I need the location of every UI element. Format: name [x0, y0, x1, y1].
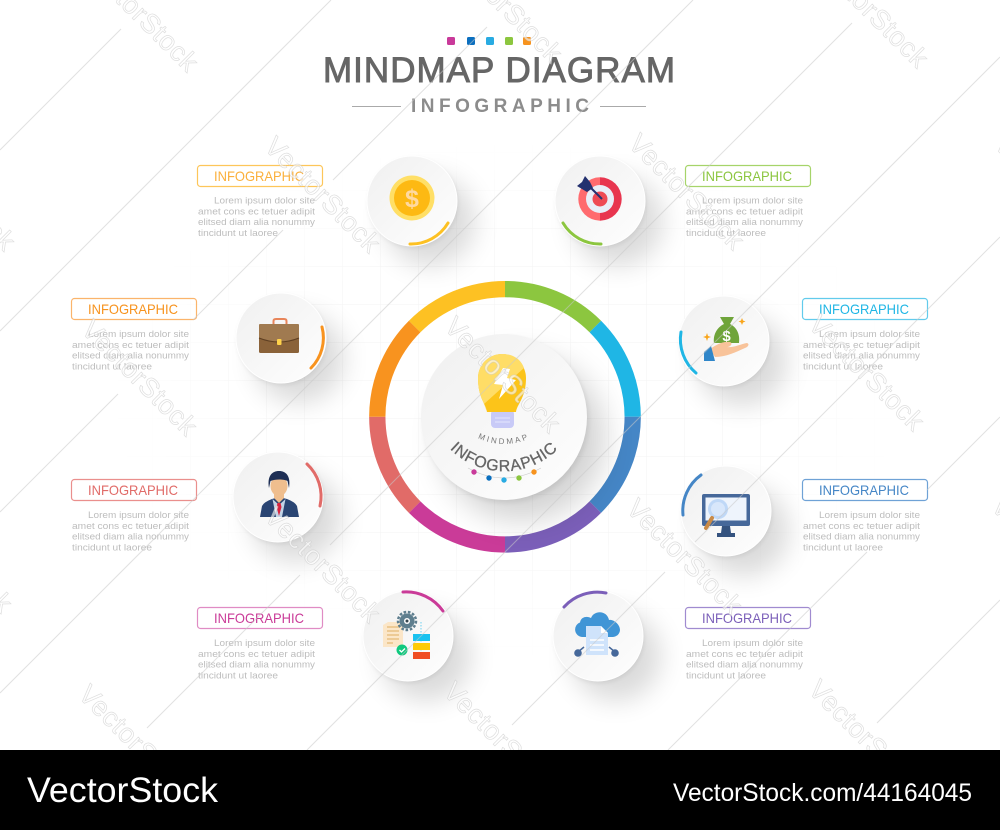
footer brand: VectorStock	[27, 771, 219, 810]
icon circle: monitor with magnifier	[681, 466, 789, 576]
colour squares	[447, 37, 531, 45]
label	[198, 608, 322, 628]
subtitle: INFOGRAPHIC	[411, 96, 589, 117]
panel: person (red)	[72, 452, 341, 562]
body text	[198, 196, 315, 238]
body text: amet cons ec tetuer adipit	[198, 206, 315, 216]
footer bar	[0, 750, 1000, 830]
watermark text: VectorStock	[76, 314, 203, 442]
body text: tincidunt ut laoree	[803, 362, 883, 372]
body text: tincidunt ut laoree	[198, 670, 278, 680]
watermark text: VectorStock	[803, 674, 930, 802]
label	[686, 166, 810, 186]
watermark text: VectorStock	[623, 128, 750, 256]
icon circle: briefcase	[236, 293, 344, 403]
body text: Lorem ipsum dolor site	[88, 510, 189, 520]
watermark text: VectorStock	[259, 131, 386, 259]
body text	[198, 638, 315, 680]
label: INFOGRAPHIC	[819, 301, 909, 317]
icon: light bulb	[478, 354, 526, 428]
icon circle: documents and workflow	[363, 591, 471, 701]
body text: Lorem ipsum dolor site	[214, 638, 315, 648]
body text	[803, 329, 920, 372]
body text: tincidunt ut laoree	[686, 670, 766, 680]
hub text: infographic: INFOGRAPHIC	[450, 442, 556, 472]
panel: cloud (purple)	[553, 591, 810, 701]
body text: tincidunt ut laoree	[198, 228, 278, 238]
body text: Lorem ipsum dolor site	[819, 510, 920, 520]
body text: elitsed diam alia nonummy	[686, 217, 803, 227]
label: INFOGRAPHIC	[214, 610, 304, 626]
body text: amet cons ec tetuer adipit	[686, 649, 803, 659]
label: INFOGRAPHIC	[819, 482, 909, 498]
watermark text: VectorStock	[259, 501, 386, 629]
label	[686, 608, 810, 628]
label: INFOGRAPHIC	[88, 301, 178, 317]
body text: tincidunt ut laoree	[72, 542, 152, 552]
panel: documents (magenta)	[198, 591, 471, 701]
panel: briefcase (orange)	[72, 293, 344, 403]
watermark text: VectorStock	[803, 309, 930, 437]
watermark text: VectorStock	[73, 679, 200, 807]
body text: Lorem ipsum dolor site	[214, 196, 315, 206]
icon circle: target	[555, 156, 663, 266]
central hub	[421, 334, 616, 532]
body text: elitsed diam alia nonummy	[803, 350, 920, 360]
body text: amet cons ec tetuer adipit	[198, 649, 315, 659]
label: INFOGRAPHIC	[88, 482, 178, 498]
body text: Lorem ipsum dolor site	[702, 196, 803, 206]
label	[72, 480, 196, 500]
panel: coin (yellow)	[198, 156, 475, 266]
body text: elitsed diam alia nonummy	[198, 217, 315, 227]
body text: tincidunt ut laoree	[72, 362, 152, 372]
label: INFOGRAPHIC	[214, 168, 304, 184]
footer image id: VectorStock.com/44164045	[673, 779, 972, 807]
body text: amet cons ec tetuer adipit	[72, 340, 189, 350]
body text: elitsed diam alia nonummy	[72, 350, 189, 360]
title block	[323, 37, 675, 117]
hub dots	[468, 468, 541, 483]
body text	[72, 329, 189, 372]
watermark text: VectorStock	[621, 493, 748, 621]
body text: elitsed diam alia nonummy	[686, 660, 803, 670]
body text: tincidunt ut laoree	[686, 228, 766, 238]
main title: MINDMAP DIAGRAM	[323, 51, 675, 90]
label	[198, 166, 322, 186]
body text: Lorem ipsum dolor site	[88, 329, 189, 339]
panel: target (green)	[555, 156, 810, 266]
body text	[72, 510, 189, 552]
icon circle: money in hand	[679, 296, 787, 406]
body text: tincidunt ut laoree	[803, 542, 883, 552]
central colour ring	[377, 289, 633, 545]
icon circle: money in hand: $	[722, 328, 731, 345]
icon circle: coin	[367, 156, 475, 266]
body text: amet cons ec tetuer adipit	[686, 206, 803, 216]
panel: money (cyan)	[679, 296, 928, 406]
label: INFOGRAPHIC	[702, 610, 792, 626]
label: INFOGRAPHIC	[702, 168, 792, 184]
icon circle: cloud document	[553, 591, 661, 701]
body text: amet cons ec tetuer adipit	[803, 340, 920, 350]
body text: amet cons ec tetuer adipit	[803, 521, 920, 531]
body text: Lorem ipsum dolor site	[702, 638, 803, 648]
body text: elitsed diam alia nonummy	[72, 532, 189, 542]
icon circle: coin: $	[405, 185, 419, 213]
body text: elitsed diam alia nonummy	[198, 660, 315, 670]
panel: monitor (blue)	[681, 466, 928, 576]
body text	[686, 638, 803, 680]
label	[802, 298, 928, 320]
label	[802, 480, 928, 500]
body text	[686, 196, 803, 238]
body text: amet cons ec tetuer adipit	[72, 521, 189, 531]
body text: Lorem ipsum dolor site	[819, 329, 920, 339]
body text	[803, 510, 920, 552]
watermark text: VectorStock	[438, 676, 565, 804]
icon circle: businessman	[233, 452, 341, 562]
watermark text: VectorStock	[439, 311, 566, 439]
hub text: mindmap: MINDMAP	[478, 433, 526, 444]
body text: elitsed diam alia nonummy	[803, 532, 920, 542]
label	[72, 298, 196, 320]
